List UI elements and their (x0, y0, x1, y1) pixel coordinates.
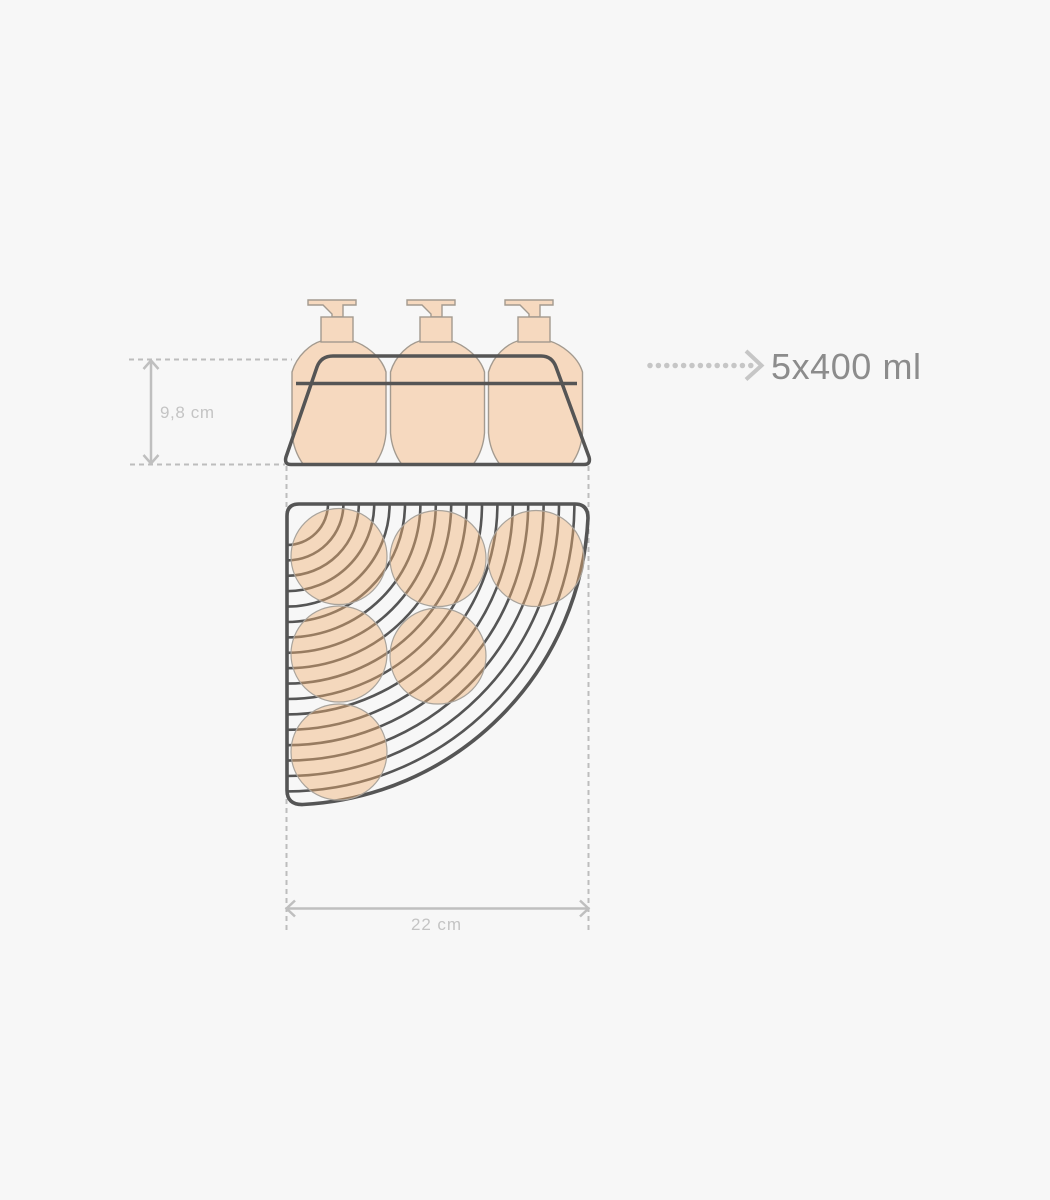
width label: 22 cm (411, 915, 461, 934)
basket ribs (287, 504, 574, 791)
bottle 3 (488, 300, 582, 464)
bottle circle 5 (390, 608, 486, 704)
height label: 9,8 cm (160, 403, 214, 422)
capacity label: 5x400 ml (771, 346, 921, 387)
dotted arrow (650, 351, 762, 380)
bottles, front view (292, 300, 582, 464)
bottle circle 3 (488, 510, 584, 606)
height arrow (144, 360, 158, 464)
bottles, top view (291, 508, 584, 800)
bottle circle 6 (291, 704, 387, 800)
basket frame (287, 504, 588, 805)
bottle circle 2 (390, 510, 486, 606)
basket, front view (286, 356, 589, 464)
basket, top view (287, 504, 588, 805)
bottle 2 (390, 300, 484, 464)
bottle circle 4 (291, 606, 387, 702)
bottle 1 (292, 300, 386, 464)
width arrow (286, 900, 589, 916)
bottle circle 1 (291, 508, 387, 604)
